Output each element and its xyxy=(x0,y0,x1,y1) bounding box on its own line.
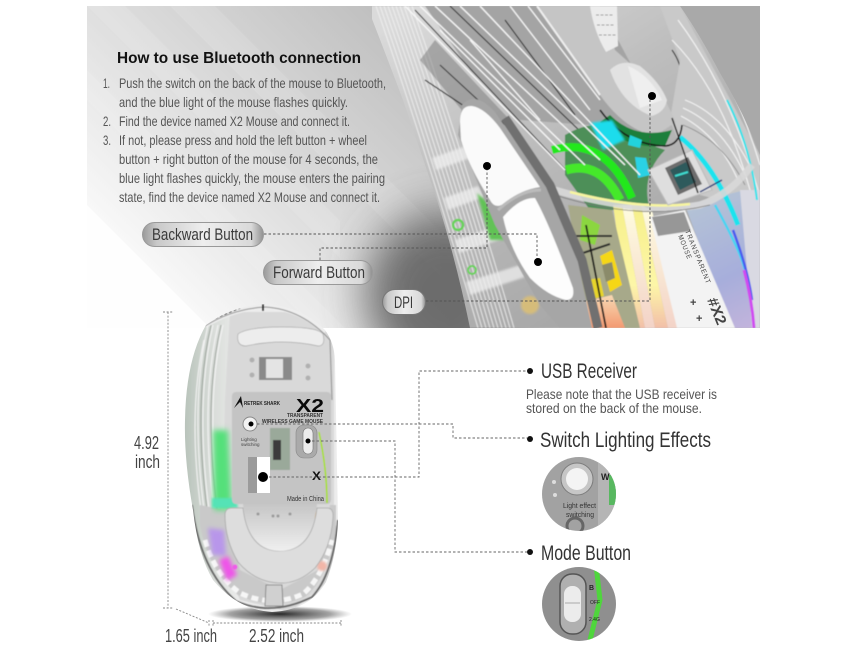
dimension: width xyxy=(213,620,341,646)
lighting button: Lighting xyxy=(241,437,257,442)
made in China: Made in China xyxy=(287,496,324,503)
feature: USB Receiver: Please note that the USB receiver is xyxy=(526,386,717,402)
ground shadow xyxy=(208,606,352,622)
callout lines: top buttons xyxy=(264,96,650,301)
orange glow xyxy=(586,294,626,328)
callout dot: DPI xyxy=(648,92,656,100)
detail circle: mode switch: B xyxy=(589,585,594,592)
pill: DPI xyxy=(382,290,426,314)
product caption: TRANSPARENT xyxy=(287,413,324,419)
pill: Backward Button xyxy=(142,222,264,246)
DPI button xyxy=(610,63,667,116)
instructions list: state, find the device named X2 Mouse and connect it. xyxy=(119,189,380,205)
upper glide foot xyxy=(238,327,324,346)
instructions list xyxy=(103,75,386,205)
scroll wheel xyxy=(590,6,618,52)
tail rim xyxy=(200,505,336,604)
instructions list: 2. xyxy=(103,113,111,129)
mode icon: X xyxy=(312,469,321,483)
lighting button xyxy=(241,417,260,447)
magenta glow xyxy=(208,528,226,556)
brand logo: RETREK SHARK xyxy=(244,401,280,407)
dimension: depth: 1.65 inch xyxy=(165,626,217,646)
pill: Forward Button: Forward Button xyxy=(273,263,365,282)
feature: Switch Lighting Effects: Switch Lighting Effects xyxy=(540,429,711,452)
lighting button: switching xyxy=(241,442,260,447)
lower glide foot xyxy=(225,508,333,583)
side button frame xyxy=(458,99,592,328)
brand logo xyxy=(234,396,280,408)
instructions list: 3. xyxy=(103,132,111,148)
dimension: height: 4.92 xyxy=(134,433,159,453)
centre panel xyxy=(232,392,331,504)
internal frame xyxy=(425,6,650,135)
lavender area xyxy=(686,192,752,328)
feature: USB Receiver: USB Receiver xyxy=(541,360,637,383)
instructions list: blue light flashes quickly, the mouse enters the pairing xyxy=(119,170,385,186)
bright green arcs xyxy=(552,147,632,198)
callout lines: bottom view xyxy=(257,371,527,552)
panel: Bluetooth connection xyxy=(87,6,760,328)
top edge reflection xyxy=(206,312,326,333)
label plate text: TRANSPARENT xyxy=(683,229,711,286)
sensor xyxy=(250,357,310,380)
USB receiver slot xyxy=(248,457,270,493)
glass band xyxy=(555,165,752,208)
instructions list: and the blue light of the mouse flashes quickly. xyxy=(119,94,348,110)
detail circle: mode switch: 2.4G xyxy=(589,617,600,623)
label plate text xyxy=(678,229,726,326)
green glow xyxy=(213,430,232,510)
dark green base xyxy=(565,125,665,210)
detail circle: mode switch xyxy=(540,565,618,643)
instructions list: Push the switch on the back of the mouse to Bluetooth, xyxy=(119,75,386,91)
side ribs xyxy=(376,6,514,328)
dimension: depth xyxy=(165,609,217,646)
instructions list: 1. xyxy=(103,75,110,91)
yellow light bands xyxy=(613,205,645,328)
label plate text: + xyxy=(696,313,702,325)
transparent mouse close-up xyxy=(370,6,762,328)
green behind side buttons xyxy=(477,193,505,240)
dimension: height: inch xyxy=(135,452,160,472)
wheel channel xyxy=(537,6,676,136)
product caption xyxy=(262,413,324,425)
detail circle: mode switch: OFF xyxy=(590,600,600,606)
mouse bottom view xyxy=(180,300,352,622)
detail circle: lighting button xyxy=(542,457,616,531)
callout dot: Backward Button xyxy=(483,162,491,170)
instructions list: Find the device named X2 Mouse and connect it. xyxy=(119,113,350,129)
white rib bars xyxy=(432,146,525,295)
foot hole xyxy=(243,504,317,551)
tail plate xyxy=(265,585,283,606)
mouse shell xyxy=(184,304,338,612)
callout dot: Forward Button xyxy=(534,258,542,266)
pill: DPI: DPI xyxy=(394,293,413,312)
instructions list: If not, please press and hold the left button + wheel xyxy=(119,132,367,148)
product caption: WIRELESS GAME MOUSE xyxy=(262,419,323,425)
feature: USB Receiver xyxy=(526,360,717,416)
sensor housing xyxy=(648,150,712,205)
dimension: width: 2.52 inch xyxy=(249,626,304,646)
instructions list: button + right button of the mouse for 4 seconds, the xyxy=(119,151,378,167)
backward button xyxy=(460,106,540,206)
component strip xyxy=(568,205,640,328)
white structural lines xyxy=(405,6,640,175)
mode switch xyxy=(296,425,317,458)
pill: Forward Button xyxy=(264,260,372,284)
feature: Mode Button: Mode Button xyxy=(541,542,631,565)
colour arcs xyxy=(680,100,757,328)
forward button xyxy=(503,198,573,300)
label plate text: + xyxy=(690,297,696,309)
feature: Mode Button xyxy=(527,542,631,565)
label plate text: MOUSE xyxy=(676,234,692,261)
detail circle: lighting button: Light effect xyxy=(563,503,596,510)
title: How to use Bluetooth connection xyxy=(117,50,361,67)
detail circle: lighting button: switching xyxy=(566,512,594,519)
model name: X2 xyxy=(296,396,324,416)
label plate xyxy=(650,210,735,328)
top right ribbed shell xyxy=(668,16,760,198)
panel background xyxy=(87,6,760,328)
label plate text: #X2 xyxy=(703,295,730,327)
pill: Backward Button: Backward Button xyxy=(152,225,253,244)
feature: USB Receiver: stored on the back of the mouse. xyxy=(526,400,702,416)
dimension: height xyxy=(134,312,173,608)
cyan glow xyxy=(590,120,625,150)
detail circle: lighting button: W xyxy=(601,472,610,482)
